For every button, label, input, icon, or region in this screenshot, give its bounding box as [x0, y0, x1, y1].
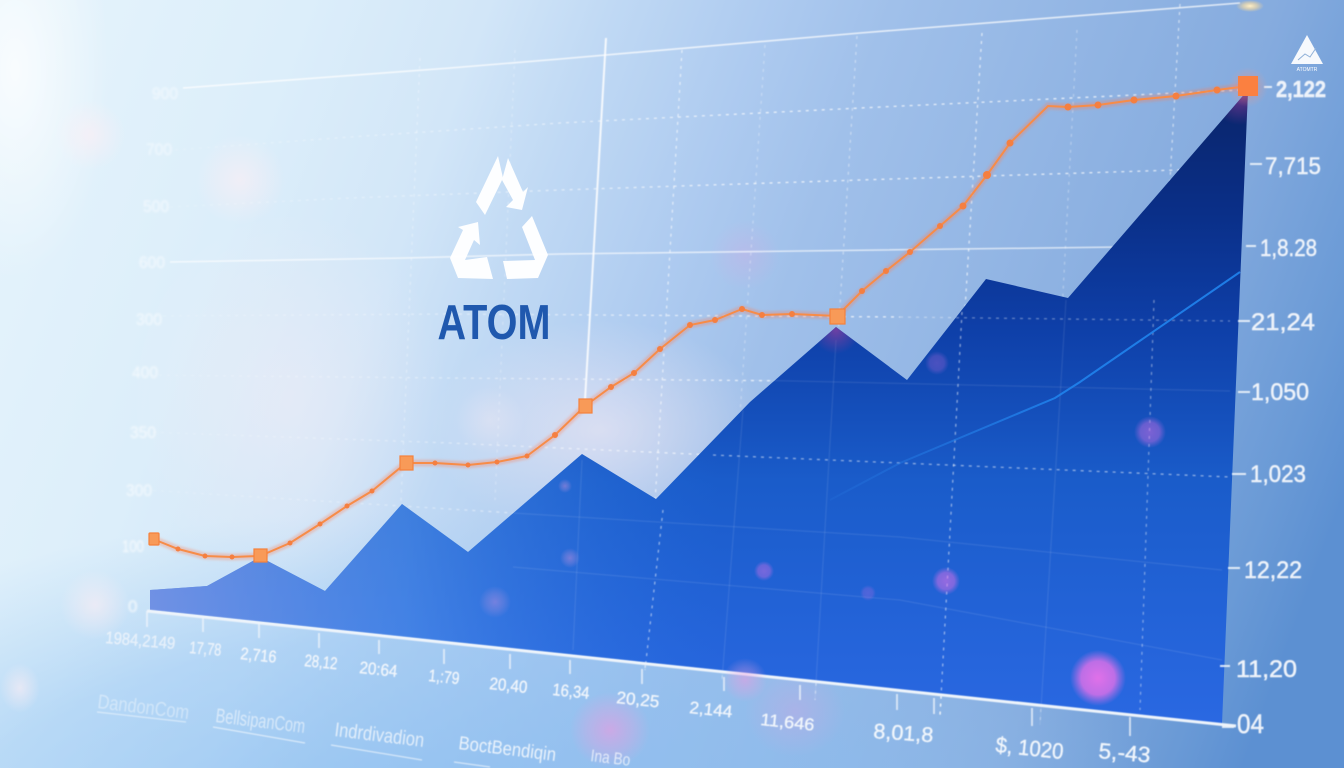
- left axis labels: 600: [139, 253, 165, 272]
- area grid overlay: [513, 300, 1230, 725]
- left axis labels: 700: [146, 140, 172, 159]
- bottom axis labels: 28,12: [304, 651, 338, 673]
- bottom axis labels: $, 1020: [994, 732, 1065, 764]
- left axis labels: 300: [136, 310, 162, 329]
- bottom category labels: BoctBendiqin: [457, 733, 557, 766]
- peak glows: [818, 96, 1248, 352]
- bottom category labels: BellsipanCom: [214, 705, 306, 738]
- bottom axis labels: 20:64: [359, 658, 398, 681]
- left axis labels: 900: [152, 84, 178, 103]
- left axis labels: 400: [132, 363, 158, 382]
- left axis labels: 0: [128, 597, 137, 616]
- right axis labels: [1236, 76, 1326, 739]
- bokeh dots: [479, 0, 1264, 706]
- bottom category labels: Indrdivadion: [333, 719, 425, 752]
- left axis labels: [122, 84, 178, 616]
- logo text: ATOM: [438, 296, 550, 350]
- right axis labels: 12,22: [1244, 557, 1302, 584]
- icon: small mountain logo: ATOMTR: [1297, 67, 1318, 73]
- line points: [176, 86, 1220, 560]
- icon: recycling triangle: [450, 156, 548, 279]
- bottom axis labels: 2,716: [240, 644, 277, 667]
- right axis labels: 11,20: [1236, 656, 1297, 683]
- left axis labels: 300: [126, 481, 152, 500]
- bottom axis labels: 16,34: [552, 680, 590, 703]
- bottom axis labels: 8,01,8: [873, 720, 934, 747]
- secondary blue line: [830, 272, 1240, 500]
- right axis labels: 1,8.28: [1260, 235, 1317, 262]
- left axis labels: 500: [143, 197, 169, 216]
- bottom axis labels: [105, 628, 1152, 768]
- y axis ticks right: [1220, 87, 1272, 727]
- icon: small mountain logo: [1291, 35, 1323, 73]
- bottom axis labels: 20,40: [489, 674, 528, 697]
- right axis labels: 7,715: [1265, 153, 1321, 180]
- grid lines: [135, 3, 1240, 725]
- bottom axis labels: 5,-43: [1098, 738, 1152, 768]
- right axis labels: 2,122: [1276, 76, 1326, 102]
- x axis: [147, 611, 1236, 736]
- square markers: [149, 309, 845, 562]
- bottom category labels: [96, 691, 632, 768]
- left axis labels: 100: [122, 537, 144, 556]
- left axis labels: 350: [130, 423, 156, 442]
- bottom axis labels: 2,144: [689, 698, 733, 721]
- bottom axis labels: 20,25: [616, 688, 660, 711]
- bottom axis labels: 17,78: [189, 638, 222, 660]
- bottom axis labels: 1,:79: [428, 666, 460, 688]
- bottom category labels: DandonCom: [96, 691, 190, 724]
- right axis labels: 1,050: [1251, 379, 1309, 406]
- axes: [147, 87, 1272, 736]
- right axis labels: 04: [1237, 709, 1264, 739]
- bottom axis labels: 1984,2149: [105, 628, 176, 653]
- right axis labels: 1,023: [1250, 461, 1306, 488]
- area chart: [150, 65, 1270, 725]
- right axis labels: 21,24: [1251, 309, 1315, 336]
- bottom axis labels: 11,646: [760, 710, 815, 735]
- orange trend line: [149, 67, 1268, 562]
